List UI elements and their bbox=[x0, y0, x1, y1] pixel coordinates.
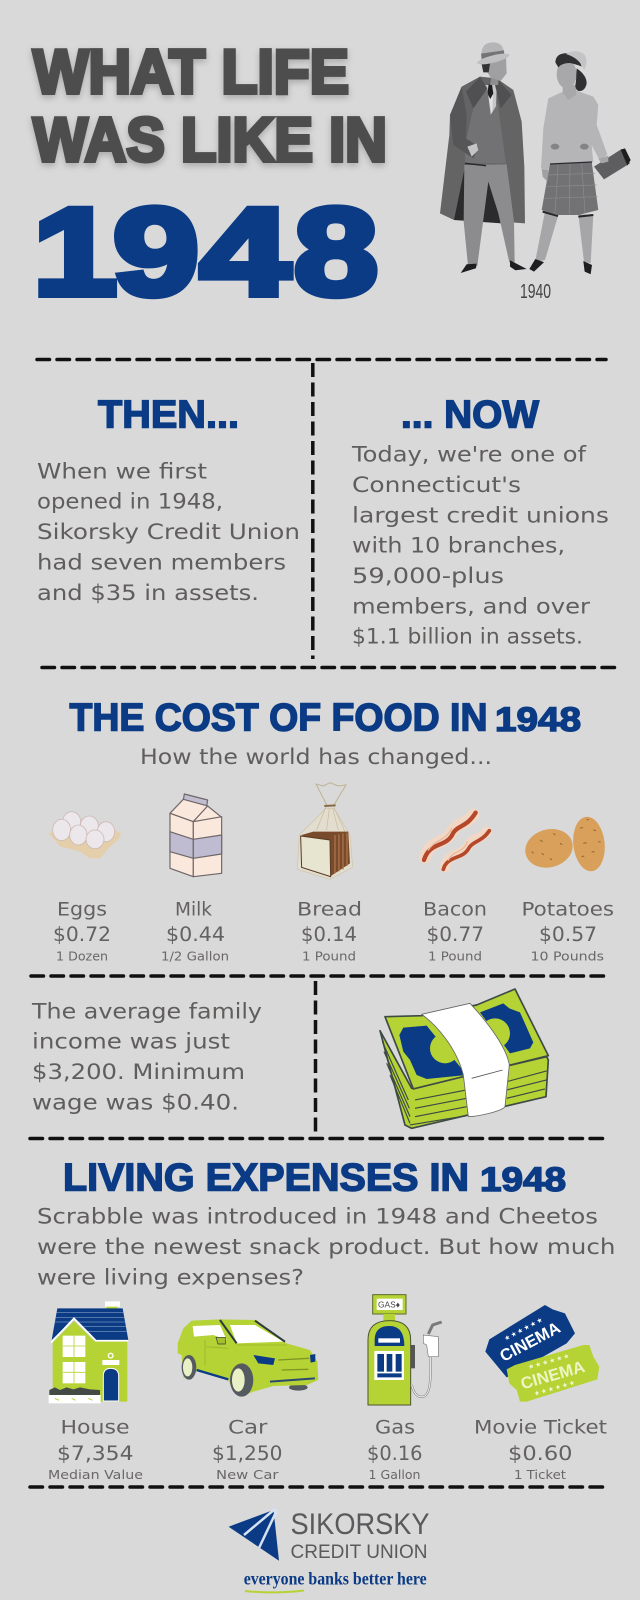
text block: living expenses intro: Scrabble was introduced in 1948 and Cheetos bbox=[37, 1204, 598, 1229]
panel: food items bbox=[48, 783, 614, 964]
food item: bacon: Bacon bbox=[423, 899, 487, 920]
text block: then: and $35 in assets. bbox=[37, 581, 259, 606]
heading: the cost of food: 1948 bbox=[495, 701, 581, 739]
logo: Sikorsky Credit Union: CREDIT UNION bbox=[290, 1542, 428, 1563]
title: WHAT LIFE bbox=[33, 38, 349, 107]
food item: bacon: $0.77 bbox=[426, 923, 484, 946]
logo: Sikorsky Credit Union: SIKORSKY bbox=[290, 1508, 430, 1541]
text block: now: 59,000-plus bbox=[352, 564, 504, 589]
icon: potatoes bbox=[521, 815, 607, 873]
heading: now: ... NOW bbox=[401, 394, 539, 436]
food item: potatoes: Potatoes bbox=[522, 899, 614, 920]
expense item: house bbox=[48, 1301, 143, 1482]
illustration: 1940s couple bbox=[440, 42, 631, 274]
title: WAS LIKE IN bbox=[33, 106, 387, 175]
food item: potatoes: 10 Pounds bbox=[530, 949, 604, 964]
text block: then: opened in 1948, bbox=[37, 490, 223, 515]
food item: potatoes bbox=[521, 815, 614, 964]
logo: Sikorsky Credit Union bbox=[229, 1508, 430, 1592]
icon: cinema tickets: CINEMA bbox=[497, 1318, 564, 1366]
logo: Sikorsky Credit Union: everyone banks better here bbox=[244, 1568, 427, 1588]
text block: income: wage was $0.40. bbox=[32, 1090, 239, 1115]
food item: bread: Bread bbox=[297, 899, 362, 920]
expense item: car: $1,250 bbox=[212, 1442, 282, 1465]
title bbox=[33, 38, 387, 175]
expense item: car: Car bbox=[228, 1417, 268, 1438]
text block: living expenses intro: were the newest snack product. But how much bbox=[37, 1235, 616, 1260]
expense item: movie ticket: Movie Ticket bbox=[474, 1417, 607, 1438]
icon: cinema tickets: ★★★★★★ bbox=[503, 1315, 545, 1343]
caption: 1940: 1940 bbox=[520, 281, 551, 303]
expense item: movie ticket: $0.60 bbox=[508, 1442, 572, 1465]
food item: bacon: 1 Pound bbox=[428, 949, 482, 964]
heading: living expenses: 1948 bbox=[480, 1161, 566, 1199]
heading: the cost of food: THE COST OF FOOD IN bbox=[70, 696, 488, 740]
expense item: car bbox=[178, 1319, 318, 1482]
year 1948: 1 bbox=[33, 184, 117, 322]
expense item: gas bbox=[367, 1295, 442, 1482]
text block: then bbox=[37, 459, 300, 606]
icon: milk carton bbox=[170, 794, 222, 877]
food item: milk bbox=[161, 794, 229, 964]
food item: milk: $0.44 bbox=[166, 923, 225, 946]
text block: now: Connecticut's bbox=[352, 473, 521, 498]
icon: gas pump bbox=[368, 1295, 442, 1405]
expense item: gas: $0.16 bbox=[367, 1442, 422, 1465]
icon: cinema tickets bbox=[485, 1305, 599, 1402]
text block: now: $1.1 billion in assets. bbox=[352, 625, 583, 650]
food item: bread: 1 Pound bbox=[302, 949, 356, 964]
year 1948: 9 bbox=[113, 184, 199, 322]
icon: bacon strips bbox=[424, 813, 489, 869]
icon: cinema tickets: CINEMA bbox=[518, 1357, 587, 1393]
food item: bread: $0.14 bbox=[301, 923, 357, 946]
icon: eggs bbox=[48, 812, 121, 858]
text block: now bbox=[351, 443, 609, 650]
food item: bacon bbox=[423, 813, 489, 964]
food item: milk: Milk bbox=[175, 899, 212, 920]
expense item: gas: 1 Gallon bbox=[368, 1467, 420, 1482]
icon: cinema tickets: ★★★★★★ bbox=[533, 1378, 577, 1398]
subheading: How the world has changed... bbox=[140, 745, 492, 770]
icon: gas pump: GAS♦ bbox=[378, 1300, 400, 1310]
food item: milk: 1/2 Gallon bbox=[161, 949, 229, 964]
food item: eggs bbox=[48, 812, 121, 964]
food item: eggs: Eggs bbox=[57, 899, 107, 920]
icon: cinema tickets: ★★★★★★ bbox=[527, 1352, 572, 1371]
icon: logo triangle bbox=[229, 1509, 279, 1561]
year 1948: 8 bbox=[294, 184, 378, 322]
panel: living expense items bbox=[48, 1295, 607, 1482]
text block: now: members, and over bbox=[352, 594, 590, 619]
food item: eggs: 1 Dozen bbox=[56, 949, 108, 964]
text block: living expenses intro: were living expenses? bbox=[37, 1265, 304, 1290]
heading: living expenses: LIVING EXPENSES IN bbox=[63, 1156, 469, 1200]
text block: then: Sikorsky Credit Union bbox=[37, 520, 300, 545]
text block: then: had seven members bbox=[37, 550, 286, 575]
year 1948 bbox=[33, 184, 378, 322]
food item: bread bbox=[297, 783, 362, 964]
food item: potatoes: $0.57 bbox=[539, 923, 597, 946]
text block: income: $3,200. Minimum bbox=[32, 1060, 245, 1085]
man in overcoat bbox=[440, 42, 527, 273]
expense item: gas: Gas bbox=[375, 1417, 415, 1438]
expense item: movie ticket bbox=[474, 1305, 607, 1482]
text block: income: The average family bbox=[31, 999, 262, 1024]
expense item: house: Median Value bbox=[48, 1467, 143, 1482]
panel: then bbox=[37, 394, 300, 606]
text block: income: income was just bbox=[32, 1030, 230, 1055]
expense item: movie ticket: 1 Ticket bbox=[514, 1467, 566, 1482]
expense item: car: New Car bbox=[216, 1467, 280, 1482]
food item: eggs: $0.72 bbox=[53, 923, 111, 946]
panel: now bbox=[351, 394, 609, 650]
text block: income bbox=[31, 999, 262, 1115]
icon: bread loaf bbox=[297, 783, 353, 879]
icon: stack of money bbox=[380, 989, 548, 1128]
text block: now: Today, we're one of bbox=[351, 443, 586, 468]
text block: then: When we first bbox=[37, 459, 207, 484]
icon: car bbox=[178, 1319, 318, 1397]
icon: house bbox=[49, 1301, 128, 1403]
heading: then: THEN... bbox=[98, 394, 239, 436]
expense item: house: $7,354 bbox=[57, 1442, 134, 1465]
woman in jacket and skirt bbox=[529, 51, 631, 274]
text block: now: with 10 branches, bbox=[352, 534, 565, 559]
year 1948: 4 bbox=[200, 184, 290, 322]
text block: living expenses intro bbox=[37, 1204, 616, 1290]
text block: now: largest credit unions bbox=[352, 503, 609, 528]
expense item: house: House bbox=[60, 1417, 130, 1438]
